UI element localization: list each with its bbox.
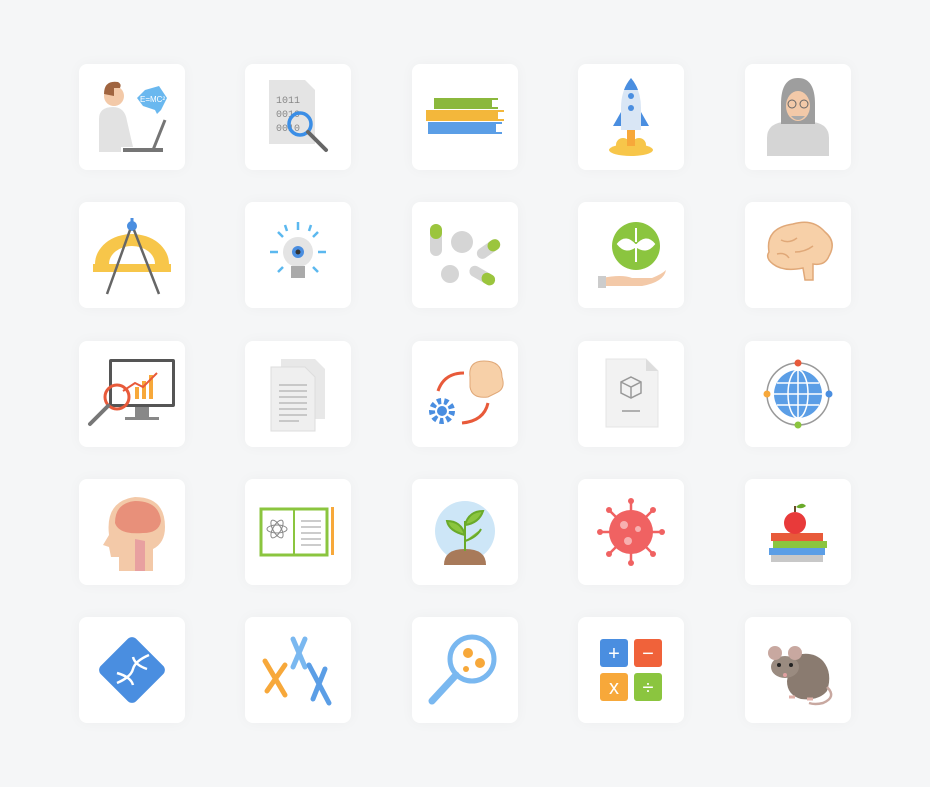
- card: calculator: x: [609, 677, 619, 699]
- card: books: [412, 64, 518, 170]
- card: DNA diamond: [79, 617, 185, 723]
- card: document with cube: [578, 341, 684, 447]
- card: monitor analytics: [79, 341, 185, 447]
- card: brain: [745, 202, 851, 308]
- card: globe network: [745, 341, 851, 447]
- card: pills: [412, 202, 518, 308]
- card: scientist at laptop: E=MC²: [140, 95, 165, 104]
- card: rocket: [578, 64, 684, 170]
- card: binary doc search: 0010: [276, 124, 300, 135]
- card: compass and protractor: [79, 202, 185, 308]
- card: documents: [245, 341, 351, 447]
- card: chromosomes: [245, 617, 351, 723]
- card: plant sphere: [412, 479, 518, 585]
- card: rat: [745, 617, 851, 723]
- card: calculator: −: [642, 643, 654, 665]
- card: binary doc search: [245, 64, 351, 170]
- card: virus: [578, 479, 684, 585]
- card: binary doc search: 0010: [276, 110, 300, 121]
- card: books and apple: [745, 479, 851, 585]
- card: calculator: ÷: [643, 677, 654, 699]
- card: old professor: [745, 64, 851, 170]
- card: open book atom: [245, 479, 351, 585]
- card: plant in hand: [578, 202, 684, 308]
- card: idea bulb eye: [245, 202, 351, 308]
- card: magnifier bacteria: [412, 617, 518, 723]
- card: calculator: +: [608, 643, 620, 665]
- card: scientist at laptop: [79, 64, 185, 170]
- card: brain gear cycle: [412, 341, 518, 447]
- card: calculator: [578, 617, 684, 723]
- card: binary doc search: 1011: [276, 96, 300, 107]
- card: head with brain: [79, 479, 185, 585]
